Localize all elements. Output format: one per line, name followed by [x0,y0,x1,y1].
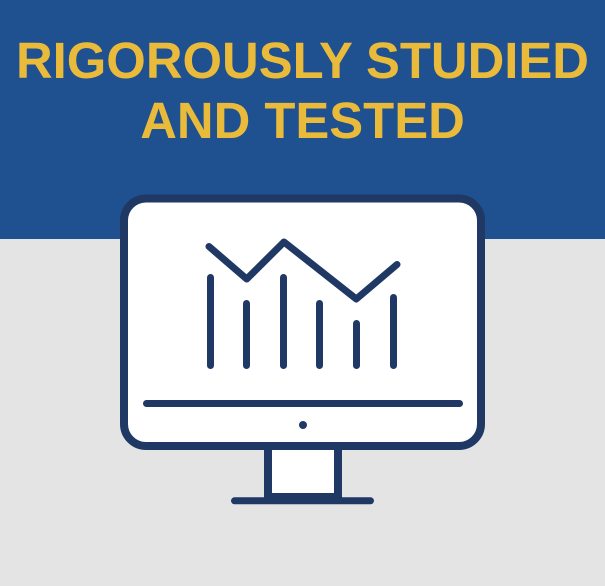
header band [0,0,605,239]
bar chart [210,278,394,366]
title [16,32,589,149]
title: RIGOROUSLY STUDIED [16,32,589,89]
screen base line [146,400,460,407]
title: AND TESTED [140,92,465,149]
trend line [209,242,397,299]
monitor screen [124,198,481,446]
power dot [299,421,307,429]
monitor stand [234,446,370,501]
